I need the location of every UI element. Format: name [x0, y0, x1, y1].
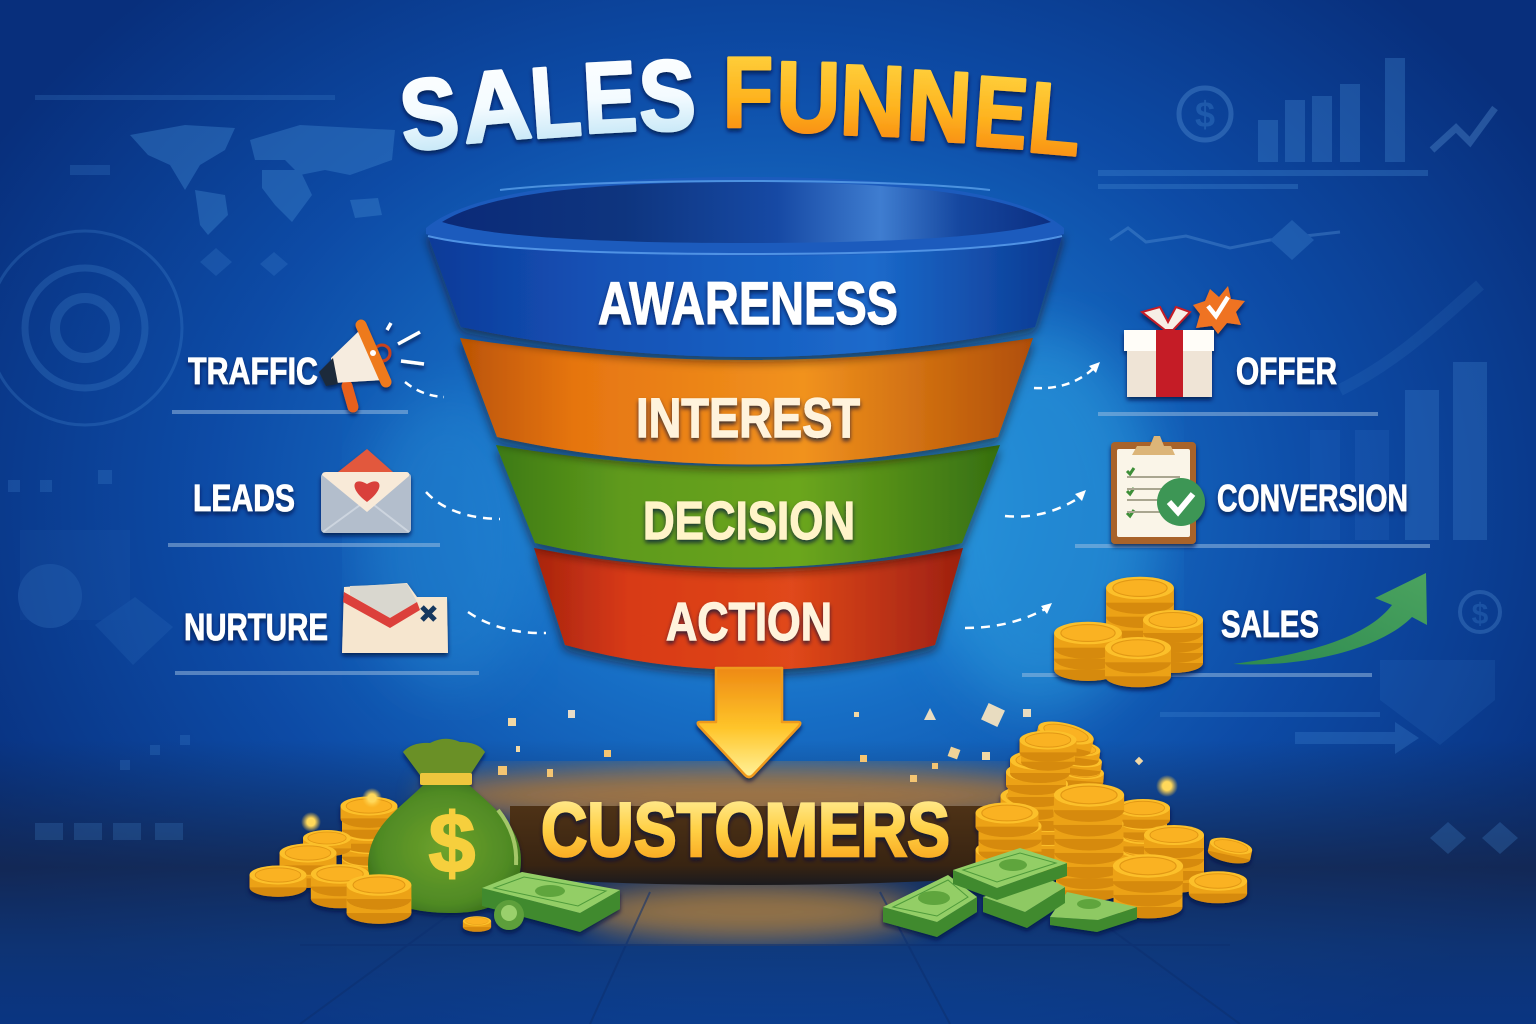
- icon: gift box: [1124, 286, 1245, 397]
- label: awareness: AWARENESS: [598, 270, 898, 337]
- icon: clipboard check: [1111, 436, 1205, 544]
- title word: FUNNEL: E: [970, 56, 1031, 171]
- right item: offer: [1034, 286, 1378, 416]
- icon: envelope heart: [321, 449, 411, 533]
- cash: bill A: [883, 875, 977, 937]
- label: leads: LEADS: [193, 478, 295, 520]
- sparkle confetti: [498, 703, 1143, 782]
- title word: SALES: S: [395, 55, 464, 172]
- funnel rim: [426, 177, 1064, 256]
- label: decision: DECISION: [643, 491, 855, 551]
- label: traffic: TRAFFIC: [188, 351, 318, 393]
- cash: bill C: [983, 878, 1065, 928]
- icon: cash stack: [482, 872, 620, 932]
- title word: FUNNEL: N: [905, 49, 974, 164]
- icon: coin stacks: [1054, 577, 1203, 687]
- background decoration: top right charts: $: [1195, 94, 1215, 135]
- label: action: ACTION: [666, 592, 832, 652]
- customers plaque: [510, 788, 990, 885]
- cash: bill D: [1050, 892, 1137, 932]
- left treasure: money bag and coins: [250, 739, 620, 932]
- left item: traffic: [172, 323, 444, 414]
- icon: money bag: [368, 739, 521, 913]
- title word: SALES: [395, 39, 697, 172]
- right treasure: coin stacks and cash: [883, 717, 1254, 937]
- growth arrow: [1233, 573, 1427, 665]
- funnel band: action: [534, 548, 963, 670]
- glowing sparks: [301, 775, 1178, 832]
- left item: leads: [168, 449, 500, 547]
- title word: FUNNEL: N: [838, 45, 907, 158]
- title word: FUNNEL: F: [723, 37, 773, 149]
- title: [395, 37, 1086, 177]
- label: customers: CUSTOMERS: [541, 788, 950, 873]
- icon: open mail: [342, 583, 448, 653]
- label: conversion: CONVERSION: [1217, 478, 1408, 520]
- background decoration: world map: [130, 125, 395, 235]
- icon: money bag: $: [429, 796, 475, 890]
- label: interest: INTEREST: [636, 386, 860, 449]
- title word: SALES: L: [527, 45, 584, 160]
- title word: FUNNEL: [723, 37, 1086, 177]
- label: sales: SALES: [1221, 604, 1319, 646]
- background decoration: top right charts: [1098, 58, 1495, 260]
- funnel band: interest: [460, 338, 1033, 464]
- background decoration: lower right bars: $: [1472, 598, 1489, 631]
- label: nurture: NURTURE: [184, 607, 328, 649]
- cash: bill B: [953, 848, 1067, 900]
- title word: FUNNEL: L: [1024, 61, 1086, 177]
- right item: sales: [965, 573, 1427, 687]
- background decoration: target rings: [0, 231, 182, 425]
- background decoration: left grid squares: [8, 95, 335, 840]
- label: offer: OFFER: [1236, 351, 1337, 393]
- icon: megaphone: [319, 323, 424, 407]
- arrow: funnel to customers: [698, 668, 800, 777]
- funnel: [426, 177, 1064, 670]
- right item: conversion: [1005, 436, 1430, 548]
- background decoration: lower right bars: [1160, 285, 1518, 854]
- title word: SALES: S: [637, 39, 697, 153]
- left item: nurture: [175, 583, 546, 675]
- title word: FUNNEL: U: [776, 41, 841, 153]
- title word: SALES: E: [580, 41, 639, 155]
- funnel band: awareness: [426, 177, 1064, 357]
- title word: SALES: A: [457, 47, 535, 164]
- funnel band: decision: [496, 445, 1000, 568]
